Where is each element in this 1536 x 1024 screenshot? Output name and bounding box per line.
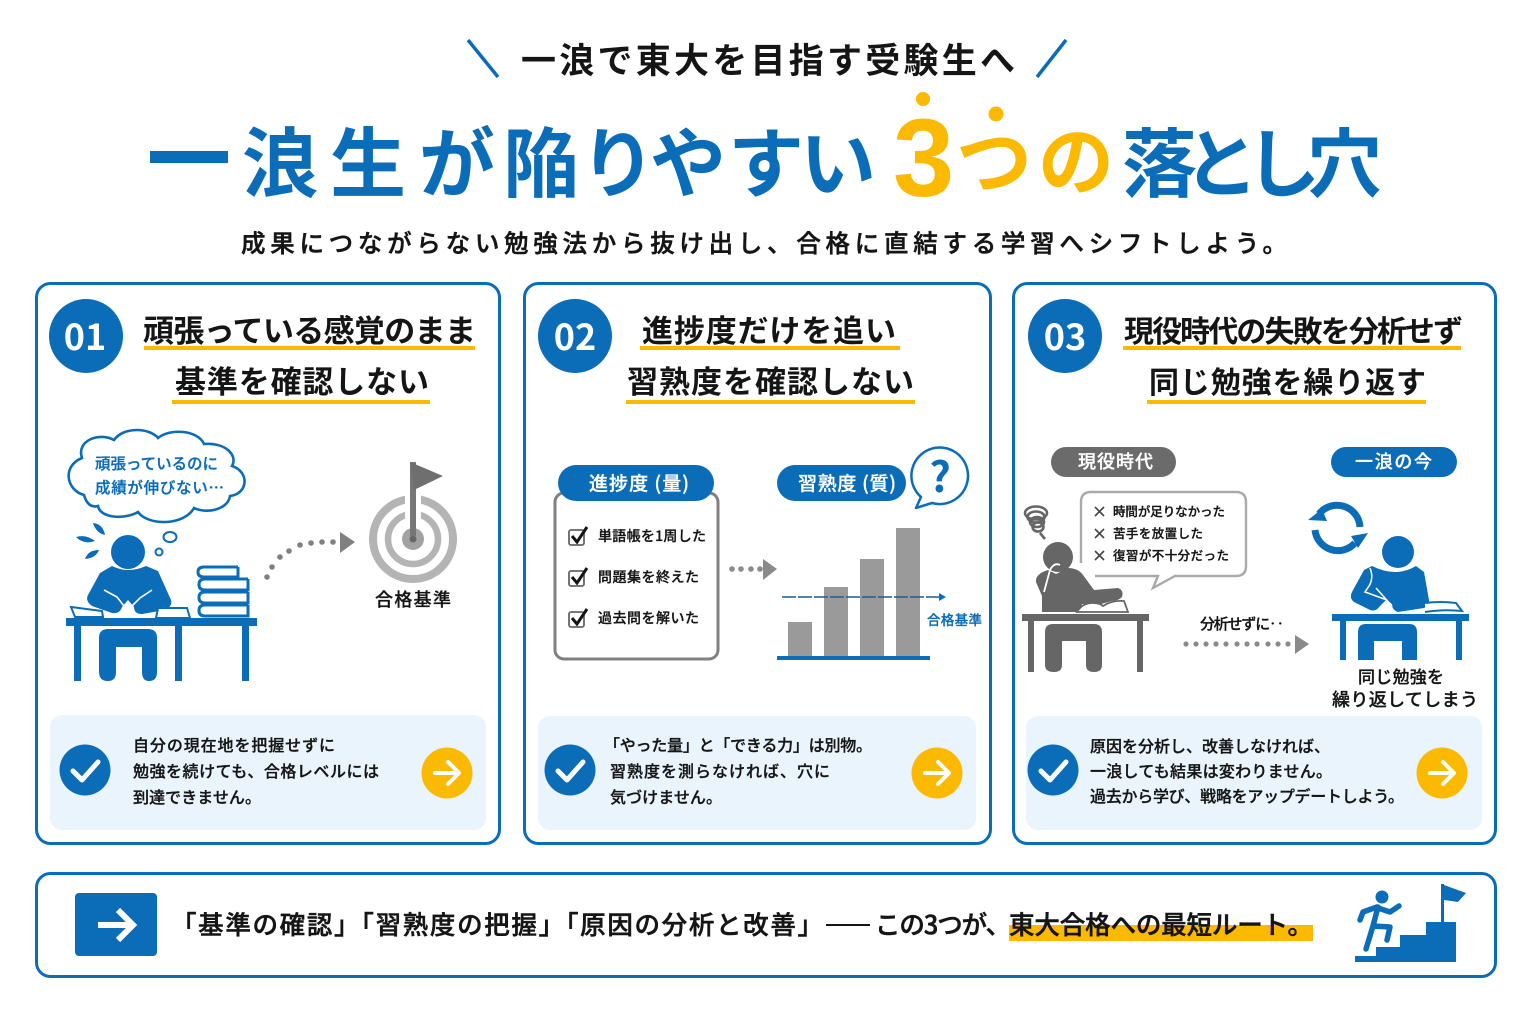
callout text: 習熟度を測らなければ、穴に: [610, 758, 830, 782]
callout text: 気づけません。: [610, 784, 722, 808]
speech bubble: reasons: 復習が不十分だった: [1113, 545, 1229, 564]
number badge 02: 02: [554, 309, 596, 361]
speech bubble: reasons: 苦手を放置した: [1113, 523, 1203, 542]
number badge 01: 01: [64, 309, 106, 361]
callout text: [604, 732, 872, 808]
callout text: [133, 732, 379, 808]
main title: 落とし穴: [1122, 104, 1382, 213]
caption: 同じ勉強を繰り返してしまう: 同じ勉強を: [1358, 663, 1444, 688]
callout text: 勉強を続けても、合格レベルには: [133, 758, 379, 782]
panel 1 heading: 基準を確認しない: [175, 357, 429, 402]
icon: yellow arrow: [1416, 748, 1468, 798]
icon: runner climbing stairs to flag: [1355, 884, 1466, 962]
callout text: 到達できません。: [133, 784, 261, 808]
panel 1: 基準を確認しない: [36, 284, 500, 844]
speech bubble: reasons: 時間が足りなかった: [1113, 501, 1225, 520]
summary text: [171, 905, 1313, 942]
arrow: dotted: [729, 559, 777, 580]
main title: [150, 92, 1382, 220]
icon: target with flag: [373, 462, 453, 579]
checklist: 進捗度(量): 問題集を終えた: [598, 567, 699, 587]
icon: question bubble: [911, 444, 968, 508]
icon: student repeating study: [1332, 536, 1469, 660]
panel 1 heading: 頑張っている感覚のまま: [143, 306, 476, 351]
panel 2 heading: 進捗度だけを追い: [642, 306, 896, 351]
icon: arrow square: [75, 893, 157, 956]
main title: 浪生が陥りやすい: [242, 103, 876, 213]
summary text: 東大合格への最短ルート。: [1009, 905, 1313, 942]
callout text: 原因を分析し、改善しなければ、: [1090, 733, 1330, 757]
label and arrow: 分析せずに: 分析せずに‥: [1200, 613, 1284, 634]
label and arrow: 分析せずに: [1183, 613, 1309, 654]
icon: cycle arrows: [1308, 505, 1368, 551]
number badge 02: [538, 299, 612, 373]
main title: 3: [893, 97, 954, 220]
panel 3: 同じ勉強を繰り返す: [1014, 284, 1496, 844]
number badge 03: [1028, 299, 1102, 373]
callout text: 自分の現在地を把握せずに: [133, 732, 335, 756]
header: [150, 33, 1382, 260]
bottom summary banner: [36, 874, 1496, 976]
icon: studying student at desk: [66, 523, 257, 681]
pill: 一浪の今: 一浪の今: [1355, 448, 1432, 474]
callout text: 一浪しても結果は変わりません。: [1090, 758, 1332, 782]
panel 3 heading: 同じ勉強を繰り返す: [1149, 358, 1426, 402]
panel 2 heading: 習熟度を確認しない: [627, 357, 914, 402]
caption: 同じ勉強を繰り返してしまう: [1332, 663, 1478, 712]
callout card 1: [50, 715, 486, 830]
main title: つ: [956, 101, 1032, 211]
bar chart: [777, 528, 982, 660]
icon: confused swirl: [1025, 506, 1047, 539]
number badge 01: [49, 299, 123, 373]
icon: check: [1028, 744, 1078, 796]
checklist: 進捗度(量): 単語帳を1周した: [598, 526, 706, 546]
speech bubble: reasons: [1081, 492, 1246, 588]
pill: 現役時代: 現役時代: [1078, 448, 1153, 474]
checklist: 進捗度(量): 過去問を解いた: [598, 608, 699, 628]
panel 1 heading: [143, 306, 476, 404]
thought cloud: 成績が伸びない…: [95, 476, 224, 498]
summary text: 「基準の確認」「習熟度の把握」「原因の分析と改善」: [171, 905, 823, 942]
main title: の: [1038, 101, 1114, 211]
callout text: 「やった量」と「できる力」は別物。: [604, 732, 872, 756]
callout card 3: [1026, 716, 1482, 830]
pill: 一浪の今: [1331, 447, 1457, 477]
callout text: 過去から学び、戦略をアップデートしよう。: [1090, 783, 1404, 807]
panel 3 heading: 現役時代の失敗を分析せず: [1124, 307, 1463, 351]
summary text: この3つが、: [875, 905, 1011, 942]
checklist: 進捗度(量): 進捗度 (量): [589, 469, 689, 496]
bar chart: 合格基準: [927, 609, 982, 629]
subtitle: 成果につながらない勉強法から抜け出し、合格に直結する学習へシフトしよう。: [241, 225, 1287, 260]
panel 3 heading: [1123, 307, 1463, 404]
eyebrow heading: 一浪で東大を目指す受験生へ: [521, 33, 1015, 84]
caption: 同じ勉強を繰り返してしまう: 繰り返してしまう: [1332, 686, 1478, 712]
arrow: dotted curve to target: [264, 532, 355, 580]
checklist: 進捗度(量): [555, 465, 718, 659]
icon: yellow arrow: [422, 748, 472, 798]
label: 合格基準: 合格基準: [375, 586, 451, 612]
thought cloud: 頑張っているのに: [95, 452, 218, 474]
icon: stack of books: [198, 567, 248, 616]
pill: 現役時代: [1051, 447, 1176, 477]
icon: check: [544, 744, 596, 796]
panel 2 heading: [626, 306, 915, 404]
icon: yellow arrow: [912, 748, 962, 798]
icon: check: [60, 744, 110, 796]
callout text: [1090, 733, 1404, 807]
thought cloud: [69, 430, 245, 522]
icon: question bubble: ?: [929, 444, 951, 505]
number badge 03: 03: [1044, 309, 1086, 361]
icon: student worrying at desk: [1022, 542, 1149, 672]
callout card 2: [538, 716, 976, 830]
panel 2: 習熟度を確認しない: [524, 284, 990, 844]
pill: 習熟度(質): [777, 465, 906, 501]
pill: 習熟度(質): 習熟度 (質): [798, 469, 896, 496]
